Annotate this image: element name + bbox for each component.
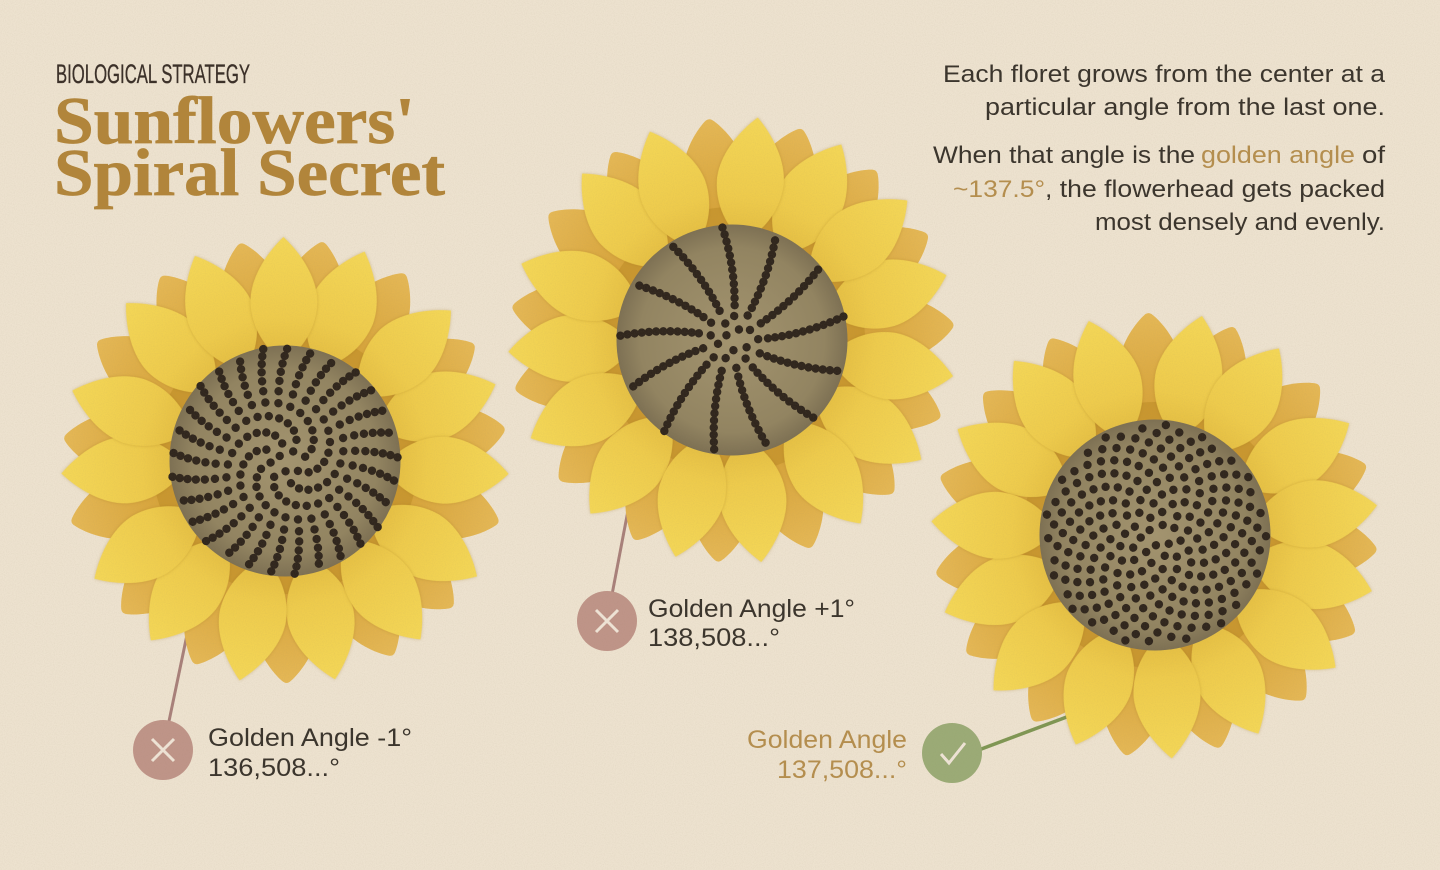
intro text: Each floret grows from the center at a <box>943 61 1385 88</box>
eyebrow: biological strategy: BIOLOGICAL STRATEGY <box>56 59 250 89</box>
icon: cross badge left <box>133 720 193 780</box>
sunflower: golden angle minus one <box>59 237 511 687</box>
seed disc <box>1040 420 1270 650</box>
label: golden angle: 137,508...° <box>777 756 907 784</box>
leader line: golden angle +1 <box>607 500 630 621</box>
icon: cross badge middle <box>577 591 637 651</box>
label: golden angle plus one <box>648 595 855 652</box>
intro text: golden angle <box>1201 142 1355 169</box>
intro text: most densely and evenly. <box>1095 209 1385 236</box>
intro text: of <box>1362 142 1385 169</box>
title <box>54 84 446 210</box>
label: golden angle plus one: Golden Angle +1° <box>648 595 855 623</box>
intro text: When that angle is the <box>933 142 1195 169</box>
seeds: radial spokes <box>614 221 851 456</box>
seeds: even packing <box>1042 420 1270 646</box>
intro text <box>933 61 1385 236</box>
seed disc <box>616 224 848 456</box>
intro text: particular angle from the last one. <box>985 94 1385 121</box>
front petals <box>929 309 1381 761</box>
intro text: , the flowerhead gets packed <box>1045 176 1385 203</box>
seed disc <box>170 346 400 576</box>
label: golden angle: Golden Angle <box>747 726 907 754</box>
title: Sunflowers' <box>54 84 415 158</box>
title: Spiral Secret <box>54 136 446 210</box>
front petals <box>59 237 511 687</box>
front petals <box>507 114 958 566</box>
label: golden angle minus one: 136,508...° <box>208 754 340 782</box>
intro text: ~137.5° <box>953 176 1045 203</box>
label: golden angle minus one <box>208 724 412 782</box>
back petals <box>931 312 1379 759</box>
label: golden angle minus one: Golden Angle -1° <box>208 724 412 752</box>
sunflower: golden angle <box>929 309 1381 761</box>
seeds: spiral arms <box>168 344 402 578</box>
leader line: golden angle -1 <box>163 630 188 750</box>
icon: check badge <box>922 723 982 783</box>
label: golden angle plus one: 138,508...° <box>648 624 780 652</box>
leader line: golden angle <box>952 712 1080 760</box>
back petals <box>508 116 956 563</box>
label: golden angle <box>747 726 907 784</box>
back petals <box>61 237 509 683</box>
sunflower: golden angle plus one <box>507 114 958 566</box>
